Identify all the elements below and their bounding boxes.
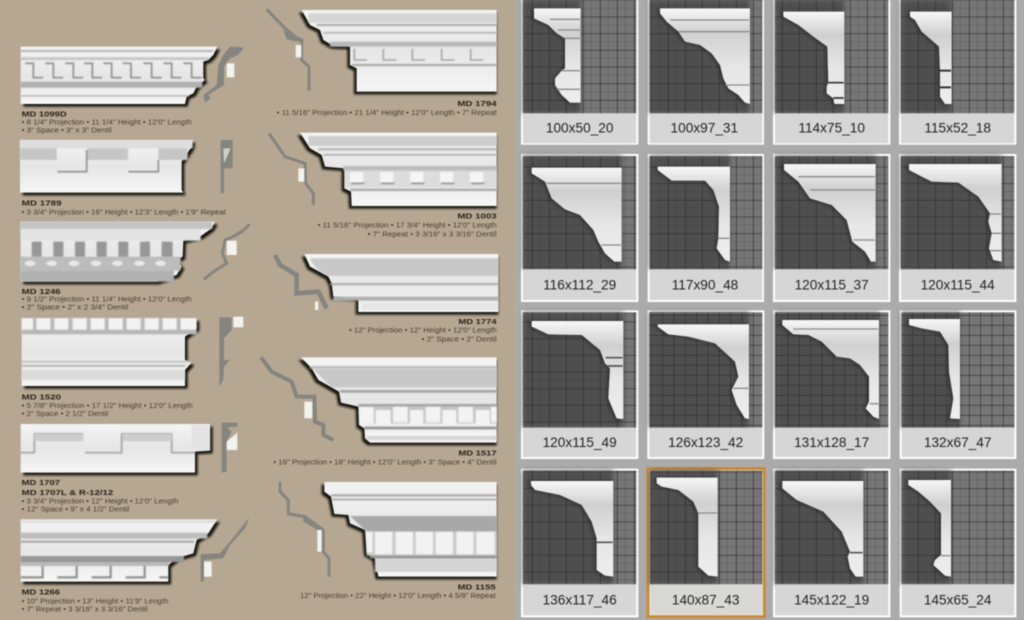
- cross-section MD 1520: [219, 317, 243, 386]
- thumbnail 120x115_37: 120x115_37: [795, 277, 869, 292]
- thumbnail 126x123_42: 126x123_42: [668, 435, 743, 450]
- moulding MD 1246: [21, 222, 218, 284]
- label MD 1003: MD 1003: [457, 212, 497, 221]
- thumbnail 100x97_31: 100x97_31: [671, 121, 738, 136]
- panel: right moulding column, lower: [261, 317, 498, 600]
- label MD 1789: MD 1789: [22, 199, 62, 208]
- thumbnail 131x128_17: 131x128_17: [794, 435, 869, 450]
- thumbnail 117x90_48: [648, 154, 764, 302]
- label MD 1246: [22, 287, 192, 312]
- cross-section MD 1789: [221, 140, 233, 193]
- panel: thumbnail gallery, right columns upper: [773, 0, 1016, 302]
- thumbnail 116x112_29: 116x112_29: [543, 277, 616, 292]
- panel: thumbnail gallery, left columns lower: [521, 310, 764, 617]
- label MD 1794: • 11 5/16" Projection • 21 1/4" Height • 12'0" Length • 7" Repeat: [277, 110, 497, 117]
- moulding MD 1789: [20, 140, 195, 195]
- label MD 1266: MD 1266: [22, 587, 60, 596]
- moulding MD 1774: [302, 254, 498, 315]
- thumbnail 140x87_43 (selected): [648, 469, 764, 617]
- label MD 1003: • 11 5/16" Projection • 17 3/4" Height • 12'0" Length: [318, 222, 497, 229]
- moulding MD 1003: [297, 133, 497, 209]
- label MD 1707: • 12" Space • 9" x 4 1/2" Dentil: [22, 506, 130, 513]
- label MD 1520: • 5 7/8" Projection • 17 1/2" Height • 12'0" Length: [22, 403, 193, 410]
- label MD 1099D: • 3" Space • 3" x 3" Dentil: [22, 128, 112, 135]
- cross-section MD 1794: [267, 9, 309, 91]
- panel: right moulding column, upper: [267, 9, 498, 315]
- thumbnail 132x67_47: [900, 310, 1016, 459]
- cross-section MD 1155: [280, 482, 329, 577]
- label MD 1517: [273, 449, 497, 467]
- cross-section MD 1774: [275, 255, 327, 310]
- label MD 1707: MD 1707L & R-12/12: [22, 488, 113, 497]
- background: thumbnail gallery: [515, 0, 1024, 620]
- panel: left moulding column, lower: [21, 317, 249, 613]
- thumbnail 126x123_42: [647, 310, 764, 459]
- thumbnail 145x122_19: 145x122_19: [794, 592, 869, 607]
- label MD 1520: • 2" Space • 2 1/2" Dentil: [22, 411, 109, 418]
- label MD 1155: MD 1155: [458, 582, 497, 591]
- label MD 1707: [22, 478, 178, 513]
- thumbnail 114x75_10: 114x75_10: [798, 121, 865, 136]
- thumbnail 120x115_49: 120x115_49: [543, 435, 617, 450]
- thumbnail 131x128_17: [773, 310, 890, 459]
- thumbnail 132x67_47: 132x67_47: [924, 435, 991, 450]
- label MD 1517: • 16" Projection • 18" Height • 12'0" Length • 3" Space • 4" Dentil: [273, 460, 497, 467]
- thumbnail 100x97_31: [648, 0, 764, 145]
- label MD 1266: • 7" Repeat • 3 3/16" x 3 3/16" Dentil: [22, 606, 148, 613]
- label MD 1794: MD 1794: [457, 99, 498, 108]
- label MD 1003: • 7" Repeat • 3 3/16" x 3 3/16" Dentil: [368, 231, 497, 238]
- cross-section MD 1266: [201, 517, 249, 582]
- panel: thumbnail gallery, left columns upper: [521, 0, 764, 302]
- label MD 1520: [22, 392, 193, 418]
- thumbnail 145x65_24: [900, 469, 1016, 617]
- thumbnail 120x115_44: [899, 154, 1016, 302]
- thumbnail 114x75_10: [773, 0, 890, 145]
- background: catalog tan page: [0, 0, 515, 620]
- thumbnail 120x115_49: [521, 310, 638, 459]
- thumbnail 120x115_37: [773, 154, 890, 302]
- label MD 1520: MD 1520: [22, 392, 61, 401]
- thumbnail 145x122_19: [773, 469, 890, 617]
- thumbnail 136x117_46: 136x117_46: [543, 592, 617, 607]
- moulding MD 1155: [322, 482, 497, 579]
- cross-section MD 1246: [204, 224, 249, 279]
- thumbnail 100x50_20: 100x50_20: [546, 121, 614, 136]
- cross-section MD 1707: [222, 423, 237, 473]
- moulding MD 1099D: [21, 47, 220, 107]
- moulding MD 1707: [21, 424, 213, 475]
- thumbnail 115x52_18: 115x52_18: [924, 121, 991, 136]
- label MD 1099D: • 8 1/4" Projection • 11 1/4" Height • 12'0" Length: [22, 119, 192, 126]
- moulding MD 1517: [298, 357, 497, 445]
- label MD 1774: MD 1774: [458, 317, 498, 326]
- cross-section MD 1099D: [203, 47, 244, 103]
- cross-section MD 1517: [261, 357, 333, 440]
- thumbnail 136x117_46: [521, 469, 638, 617]
- moulding MD 1794: [299, 10, 497, 94]
- label MD 1707: • 3 3/4" Projection • 12" Height • 12'0" Length: [22, 498, 178, 505]
- thumbnail 117x90_48: 117x90_48: [672, 277, 738, 292]
- label MD 1707: MD 1707: [22, 478, 60, 487]
- cross-section MD 1003: [269, 133, 313, 205]
- label MD 1774: • 2" Space • 2" Dentil: [422, 337, 497, 344]
- panel: thumbnail gallery, right columns lower: [773, 310, 1016, 617]
- label MD 1155: [300, 582, 497, 600]
- label MD 1246: • 2" Space • 2" x 2 3/4" Dentil: [22, 305, 129, 312]
- label MD 1099D: MD 1099D: [22, 110, 67, 119]
- label MD 1774: [349, 317, 498, 344]
- moulding MD 1520: [22, 318, 199, 389]
- label MD 1789: • 3 3/4" Projection • 16" Height • 12'3" Length • 1'9" Repeat: [22, 209, 226, 216]
- label MD 1266: [22, 587, 168, 613]
- moulding MD 1266: [21, 519, 220, 584]
- label MD 1517: MD 1517: [458, 449, 497, 458]
- thumbnail 120x115_44: 120x115_44: [921, 277, 995, 292]
- thumbnail 140x87_43 (selected): 140x87_43: [672, 592, 739, 607]
- label MD 1794: [277, 99, 498, 117]
- label MD 1774: • 12" Projection • 12" Height • 12'0" Length: [349, 328, 497, 335]
- label MD 1099D: [22, 110, 192, 135]
- label MD 1266: • 10" Projection • 13" Height • 11'9" Length: [22, 598, 168, 605]
- label MD 1003: [318, 212, 497, 238]
- thumbnail 116x112_29: [521, 154, 638, 302]
- thumbnail 115x52_18: [899, 0, 1016, 145]
- label MD 1246: • 9 1/2" Projection • 11 1/4" Height • 12'0" Length: [22, 297, 192, 304]
- label MD 1246: MD 1246: [22, 287, 61, 296]
- label MD 1789: [22, 199, 226, 216]
- label MD 1155: 12" Projection • 22" Height • 12'0" Length • 4 5/8" Repeat: [300, 593, 496, 600]
- thumbnail 100x50_20: [521, 0, 638, 145]
- panel: left moulding column, upper: [20, 47, 249, 312]
- thumbnail 145x65_24: 145x65_24: [924, 592, 992, 607]
